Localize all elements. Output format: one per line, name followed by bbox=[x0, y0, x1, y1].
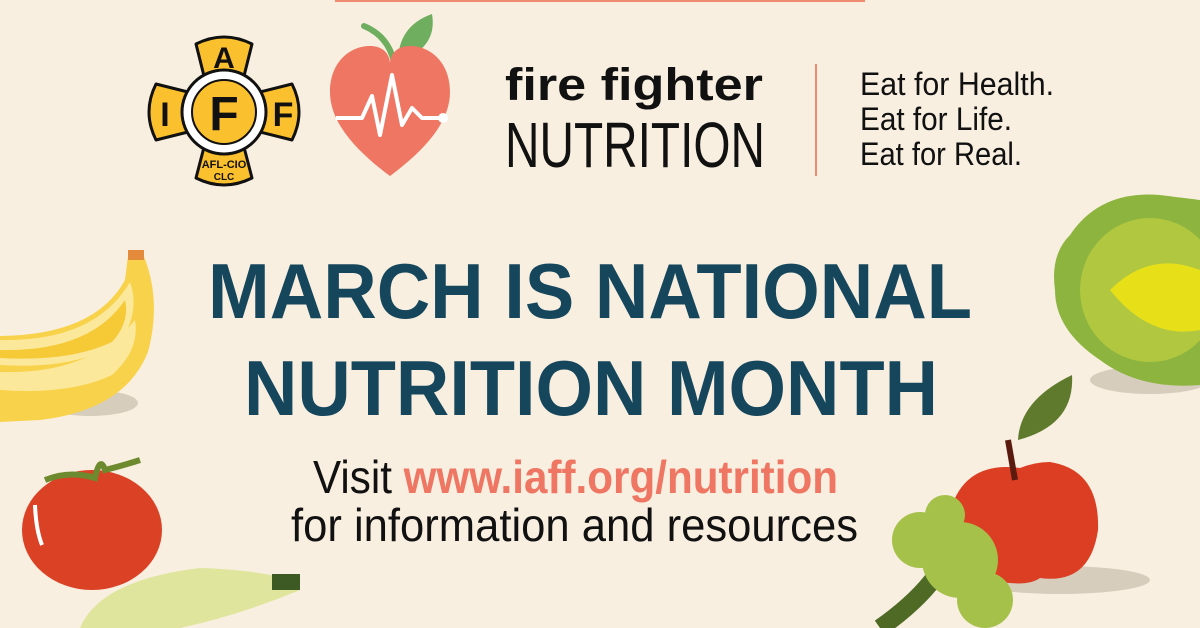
call to action text: for information and resources bbox=[291, 499, 858, 551]
heading: fire fighter nutrition bbox=[505, 59, 765, 181]
tagline: Eat for Health. bbox=[860, 66, 1054, 102]
call to action text bbox=[291, 451, 858, 551]
heading: fire fighter nutrition: fire fighter bbox=[505, 59, 763, 110]
call to action text: Visit www.iaff.org/nutrition bbox=[313, 451, 838, 503]
title: NUTRITION MONTH bbox=[244, 344, 938, 432]
tagline: Eat for Real. bbox=[860, 136, 1022, 172]
tagline bbox=[860, 66, 1054, 172]
icon: zucchini bbox=[80, 568, 300, 628]
icon: IAFF logo: F bbox=[273, 96, 293, 134]
icon: apple bbox=[948, 375, 1150, 594]
icon: IAFF logo: A bbox=[213, 42, 235, 75]
icon: tomato bbox=[22, 460, 162, 590]
icon: IAFF logo bbox=[149, 37, 299, 185]
icon: IAFF logo: CLC bbox=[214, 172, 234, 183]
icon: cabbage bbox=[1054, 194, 1200, 394]
title bbox=[208, 247, 972, 432]
tagline: Eat for Life. bbox=[860, 101, 1012, 137]
icon: IAFF logo: F bbox=[209, 88, 239, 141]
title: MARCH IS NATIONAL bbox=[208, 247, 972, 335]
top accent bar bbox=[335, 0, 865, 2]
icon: heart apple logo bbox=[330, 14, 450, 176]
icon: broccoli bbox=[880, 495, 1013, 628]
icon: banana bbox=[0, 250, 154, 422]
heading: fire fighter nutrition: NUTRITION bbox=[505, 109, 765, 181]
icon: IAFF logo: AFL-CIO bbox=[202, 159, 247, 171]
icon: IAFF logo: I bbox=[160, 96, 170, 134]
